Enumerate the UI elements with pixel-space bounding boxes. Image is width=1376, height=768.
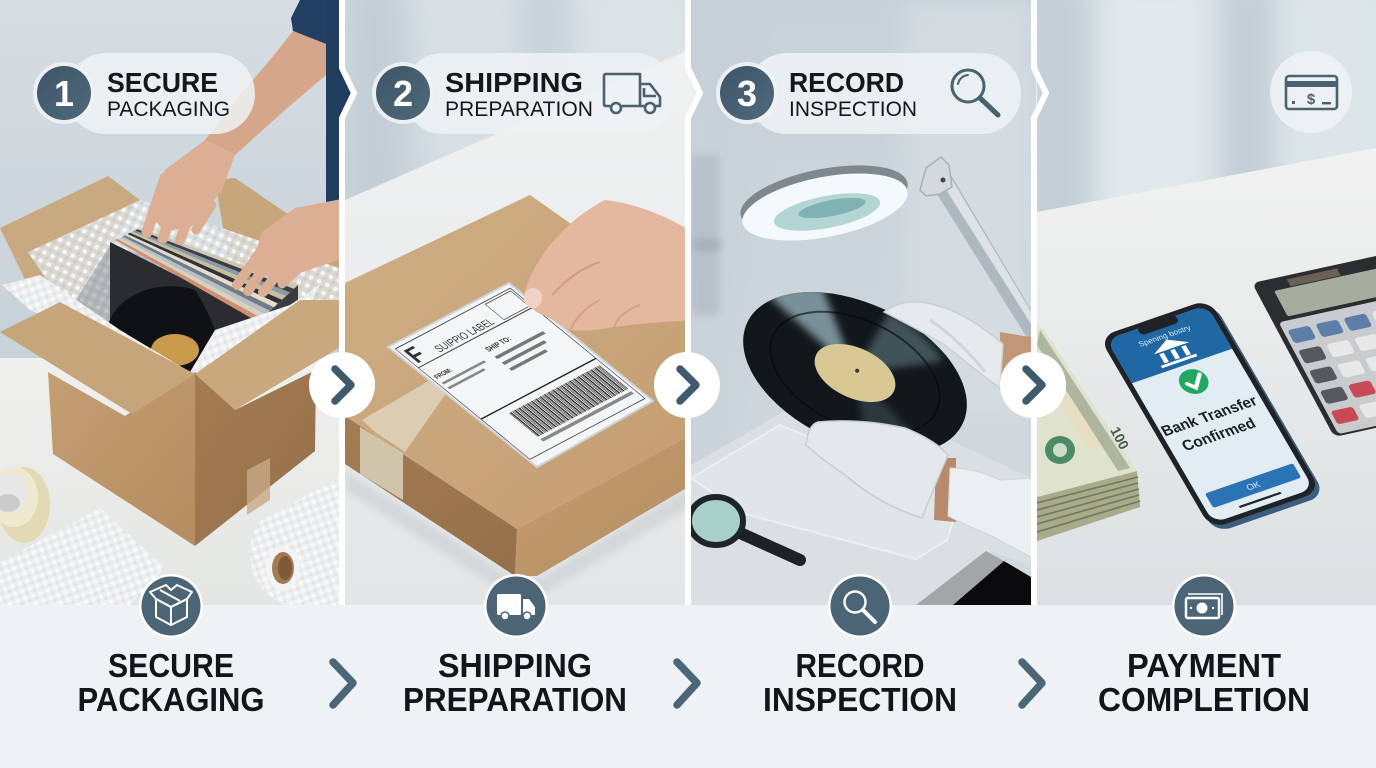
panel divider chevrons xyxy=(342,0,1046,605)
next button 1 xyxy=(309,352,375,418)
heading: record inspection: RECORD xyxy=(796,647,924,684)
cash stack: 100 xyxy=(1107,424,1133,452)
next button 2 xyxy=(654,352,720,418)
shipping label: SHIP TO: xyxy=(483,335,514,353)
bubble wrap front edge xyxy=(2,275,320,378)
icon: box badge xyxy=(139,574,203,638)
confirmation text: Confirmed xyxy=(1179,416,1259,455)
heading: secure packaging: SECURE xyxy=(108,647,234,684)
step 3 pill: record inspection: 3 xyxy=(737,73,757,114)
heading: secure packaging xyxy=(78,647,264,718)
phone with bank transfer confirmation xyxy=(1099,298,1325,534)
heading: shipping preparation: PREPARATION xyxy=(403,681,627,718)
bottom band xyxy=(0,605,1376,768)
step 1 pill: secure packaging: PACKAGING xyxy=(107,98,230,121)
open box back flaps and interior xyxy=(0,176,339,322)
hand peeling label xyxy=(524,200,697,331)
lamp xyxy=(735,153,1036,352)
step 2 pill: shipping preparation: PREPARATION xyxy=(445,98,593,121)
person's shirt xyxy=(291,0,351,202)
step 3 pill: record inspection xyxy=(716,53,1021,134)
calculator xyxy=(1252,242,1376,437)
cash stack xyxy=(1037,325,1140,541)
glove lower hand and cuff xyxy=(806,421,1036,560)
step 2 pill: shipping preparation xyxy=(372,53,675,134)
shipping label: SUIPPIO LABEL xyxy=(432,317,498,355)
icon: banknotes badge xyxy=(1172,574,1236,638)
confirmation text xyxy=(1160,397,1256,450)
icon: truck outline xyxy=(604,74,660,113)
vinyl record xyxy=(743,292,967,446)
panel: payment completion photo xyxy=(1020,0,1376,605)
records xyxy=(108,228,298,372)
icon: payment card: $ xyxy=(1307,91,1316,108)
step 1 pill: secure packaging: SECURE xyxy=(107,67,218,98)
shipping label: F xyxy=(399,343,434,368)
icon: magnifier badge xyxy=(828,574,892,638)
step 3 pill: record inspection: INSPECTION xyxy=(789,98,917,121)
glove upper hand xyxy=(884,302,1036,390)
loose bubble wrap xyxy=(0,508,165,605)
tape roll xyxy=(0,467,50,543)
arrow 1 xyxy=(333,662,353,705)
panel: secure packaging photo xyxy=(0,0,352,605)
small magnifier xyxy=(689,497,800,560)
arm xyxy=(205,31,326,155)
check badge xyxy=(1178,369,1209,394)
ok button: OK xyxy=(1244,480,1262,492)
shipping box xyxy=(345,195,700,596)
heading: shipping preparation xyxy=(403,647,627,718)
icon: truck badge xyxy=(484,574,548,638)
arrow 3 xyxy=(1022,662,1042,705)
desk and mat xyxy=(691,385,1036,605)
panel: shipping preparation photo xyxy=(345,0,700,605)
step 1 pill: secure packaging xyxy=(33,53,255,134)
shipping label: FROM: xyxy=(433,367,455,381)
step 2 pill: shipping preparation: 2 xyxy=(393,73,413,114)
ok button xyxy=(1205,463,1301,508)
heading: payment completion xyxy=(1098,647,1310,718)
heading: shipping preparation: SHIPPING xyxy=(438,647,592,684)
left hand xyxy=(147,140,235,240)
step 2 pill: shipping preparation: SHIPPING xyxy=(445,67,583,98)
bubble wrap roll xyxy=(250,477,339,605)
step 4 badge: payment card xyxy=(1270,51,1352,133)
heading: record inspection: INSPECTION xyxy=(763,681,957,718)
cardboard box body xyxy=(0,300,352,546)
panel: record inspection photo xyxy=(670,0,1036,605)
arrow 2 xyxy=(677,662,697,705)
heading: record inspection xyxy=(763,647,957,718)
heading: secure packaging: PACKAGING xyxy=(78,681,264,718)
confirmation text: Bank Transfer xyxy=(1159,393,1260,440)
right hand xyxy=(237,197,352,292)
step 3 pill: record inspection: RECORD xyxy=(789,67,904,98)
phone with bank transfer confirmation: Spening bostry xyxy=(1137,323,1192,349)
step 1 pill: secure packaging: 1 xyxy=(54,73,74,114)
heading: payment completion: PAYMENT xyxy=(1127,647,1281,684)
icon: magnifier outline xyxy=(952,70,998,115)
heading: payment completion: COMPLETION xyxy=(1098,681,1310,718)
bank icon xyxy=(1154,340,1198,368)
shipping label xyxy=(388,283,653,467)
next button 3 xyxy=(1000,352,1066,418)
